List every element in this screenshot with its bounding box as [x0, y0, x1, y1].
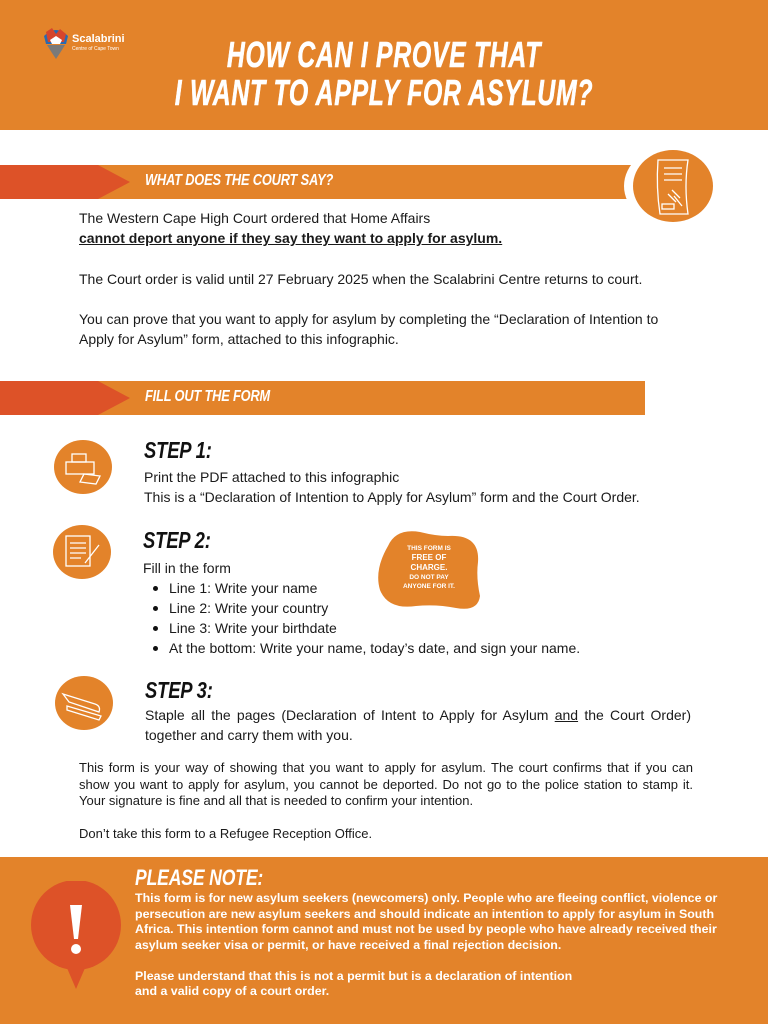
banner: what does the court say [0, 165, 631, 199]
callout: free of charge: THIS FORM IS [407, 545, 451, 552]
callout: free of charge: ANYONE FOR IT. [403, 583, 455, 590]
step 3 [55, 676, 691, 743]
callout: free of charge [378, 531, 480, 609]
panel: please note [0, 857, 768, 1024]
icon: stapler [55, 676, 113, 730]
text: court order: The Western Cape High Court ordered that Home Affairs [79, 210, 430, 226]
title: HOW CAN I PROVE THAT [227, 34, 541, 75]
text: court order: cannot deport anyone if they say they want to apply for asylum. [79, 230, 502, 246]
step 2: Line 2: Write your country [169, 600, 328, 616]
icon: exclamation bubble [31, 881, 121, 989]
logo: Scalabrini [72, 33, 125, 45]
step 2: Line 1: Write your name [169, 580, 317, 596]
text: You can prove that you want to apply for asylum by completing the “Declaration of Intention to Apply for Asylum” form, attached to this infographic. [79, 311, 658, 347]
text: Don’t take this form to a Refugee Reception Office. [79, 826, 372, 841]
step 1 [54, 437, 640, 505]
text: court order [79, 210, 502, 246]
banner: what does the court say: WHAT DOES THE COURT SAY? [145, 172, 333, 189]
callout: free of charge: DO NOT PAY [409, 574, 449, 581]
step 2: STEP 2: [143, 527, 211, 553]
step 2: Fill in the form [143, 560, 231, 576]
icon: printer [54, 440, 112, 494]
icon: court scroll and gavel [624, 146, 718, 226]
step 1: This is a “Declaration of Intention to Apply for Asylum” form and the Court Order. [144, 489, 640, 505]
text: The Court order is valid until 27 February 2025 when the Scalabrini Centre returns to court. [79, 271, 642, 287]
text: explanation: This form is your way of showing that you want to apply for asylum. The court confirms that if you can show you want to apply for asylum, you cannot be deported. Do not go to the police station to stamp it. Your signature is fine and all that is needed to confirm your intention. [79, 760, 693, 808]
header band [0, 0, 768, 130]
step 1: STEP 1: [144, 437, 212, 463]
panel: please note: PLEASE NOTE: [135, 865, 263, 890]
banner: fill out the form: FILL OUT THE FORM [145, 388, 270, 405]
step 2 [53, 525, 580, 656]
step 2: Line 3: Write your birthdate [169, 620, 337, 636]
logo [44, 28, 125, 59]
banner: fill out the form [0, 381, 645, 415]
icon: form and pen [53, 525, 111, 579]
title [174, 34, 593, 113]
panel: please note: and a valid copy of a court order. [135, 984, 329, 998]
title: I WANT TO APPLY FOR ASYLUM? [175, 72, 593, 113]
step 1: Print the PDF attached to this infographic [144, 469, 399, 485]
panel: please note: This form is for new asylum seekers (newcomers) only. People who are fleeing conflict, violence or persecution are new asylum seekers and should indicate an intention to apply for asylum in South Africa. This intention form cannot and must not be used by people who have already received their asylum seeker visa or permit, or have received a final rejection decision. [135, 891, 717, 952]
panel: please note: Please understand that this is not a permit but is a declaration of intention [135, 968, 572, 982]
logo: Centre of Cape Town [72, 46, 119, 52]
step 2: At the bottom: Write your name, today’s date, and sign your name. [169, 640, 580, 656]
step 3: Staple all the pages (Declaration of Intent to Apply for Asylum and the Court Order) together and carry them with you. [145, 707, 691, 743]
step 3: STEP 3: [145, 677, 213, 703]
callout: free of charge: CHARGE. [411, 563, 447, 572]
callout: free of charge: FREE OF [412, 553, 446, 562]
